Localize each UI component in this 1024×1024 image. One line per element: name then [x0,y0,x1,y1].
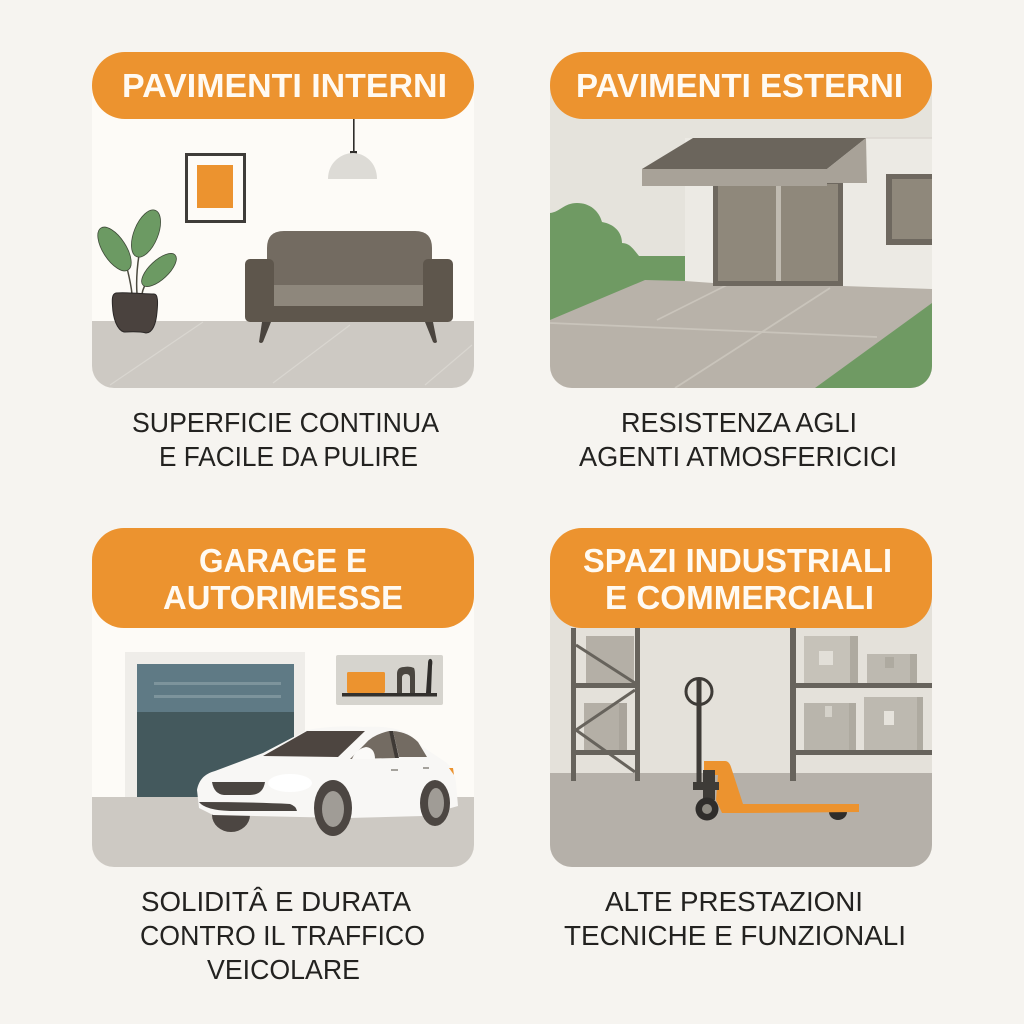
garage door [125,652,305,797]
icon: pendant lamp [328,115,377,179]
awning [642,138,867,186]
heading pill [92,528,474,628]
caption: SUPERFICIE CONTINUA [132,407,439,438]
panel: pavimenti interni [91,52,474,472]
panel: pavimenti esterni [550,52,936,472]
caption [564,886,906,951]
caption: AGENTI ATMOSFERICICI [579,441,897,472]
caption: VEICOLARE [207,954,360,985]
caption [132,407,439,472]
heading pill: SPAZI INDUSTRIALI [583,542,892,579]
building wall [685,138,932,292]
icon: car [197,726,458,836]
panel: garage e autorimesse [92,528,474,985]
pavement [550,280,932,388]
icon: wall shelf [336,655,443,705]
icon: bush [550,203,685,325]
icon: sofa [245,231,453,343]
caption: RESISTENZA AGLI [621,407,857,438]
window [886,174,936,245]
icon: framed picture [186,154,244,222]
caption: ALTE PRESTAZIONI [605,886,863,917]
heading pill: PAVIMENTI ESTERNI [576,67,903,104]
room illustration [92,119,474,388]
heading pill: E COMMERCIALI [605,579,874,616]
caption: SOLIDITÂ E DURATA [141,886,411,917]
heading pill [550,52,932,119]
icon: plant [97,210,177,334]
caption [579,407,897,472]
heading pill [550,528,932,628]
caption: E FACILE DA PULIRE [159,441,418,472]
left rack [571,628,640,781]
heading pill: PAVIMENTI INTERNI [122,67,447,104]
garage illustration [92,655,474,867]
icon: pallet jack [686,678,859,820]
caption [140,886,425,985]
caption: TECNICHE E FUNZIONALI [564,920,906,951]
infographic canvas [92,52,932,980]
panel: spazi industriali e commerciali [550,528,932,951]
exterior illustration [550,60,936,388]
right rack [790,628,932,781]
caption: CONTRO IL TRAFFICO [140,920,425,951]
door [713,180,843,286]
heading pill: AUTORIMESSE [163,579,403,616]
heading pill: GARAGE E [199,542,367,579]
heading pill [92,52,474,119]
warehouse illustration [550,599,932,867]
lawn corner [815,303,932,388]
